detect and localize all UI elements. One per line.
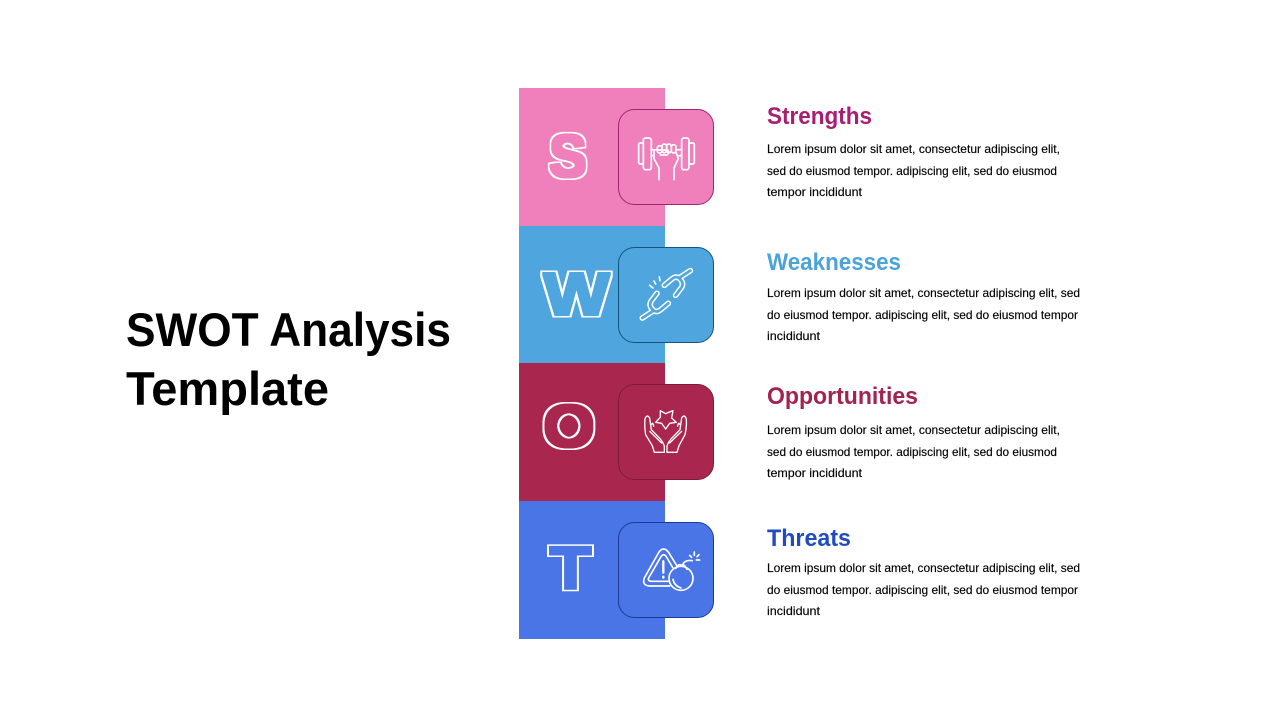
text block: threats: incididunt [767,604,821,618]
text block: threats: Threats [767,525,851,552]
letter T: T [550,536,591,601]
colour band: strengths [519,88,665,226]
text block: weaknesses: Weaknesses [767,249,901,276]
letter S: S [549,124,587,190]
text block: strengths: tempor incididunt [767,185,863,199]
text block: strengths: Lorem ipsum dolor sit amet, consectetur adipiscing elit, [767,142,1060,156]
text block: opportunities: Lorem ipsum dolor sit amet, consectetur adipiscing elit, [767,423,1060,437]
icon card: opportunities [618,384,714,480]
text block: threats: do eiusmod tempor. adipiscing elit, sed do eiusmod tempor [767,583,1078,597]
icon card: threats [618,522,714,618]
panel: opportunities block [519,363,714,501]
panel: strengths block [519,88,714,226]
text block: strengths: Strengths [767,103,872,130]
text block: strengths: sed do eiusmod tempor. adipiscing elit, sed do eiusmod [767,164,1057,178]
text block: weaknesses [767,249,1080,343]
icon: hands holding star [645,411,686,452]
letter W: W [544,261,609,327]
icon card: strengths [618,110,714,204]
text block: opportunities: tempor incididunt [767,466,863,480]
colour band: threats [519,501,665,639]
panel: weaknesses block [519,226,714,363]
text block: opportunities: Opportunities [767,383,918,410]
panel: threats block [519,501,714,639]
icon: dumbbell in fist [639,138,694,180]
text block: opportunities [767,383,1060,480]
text block: weaknesses: Lorem ipsum dolor sit amet, consectetur adipiscing elit, sed [767,286,1080,300]
text block: threats [767,525,1080,618]
text block: weaknesses: incididunt [767,329,821,343]
text block: strengths [767,103,1060,199]
text block: weaknesses: do eiusmod tempor. adipiscing elit, sed do eiusmod tempor [767,308,1078,322]
icon: broken chain [642,271,690,318]
icon card: weaknesses [618,248,714,342]
text block: opportunities: sed do eiusmod tempor. adipiscing elit, sed do eiusmod [767,445,1057,459]
text block: threats: Lorem ipsum dolor sit amet, consectetur adipiscing elit, sed [767,561,1080,575]
colour band: weaknesses [519,226,665,363]
letter O: O [543,394,595,460]
title [126,303,451,415]
title: SWOT Analysis [126,303,451,356]
title: Template [126,362,329,415]
icon: warning sign and bomb [644,549,700,590]
colour band: opportunities [519,363,665,501]
